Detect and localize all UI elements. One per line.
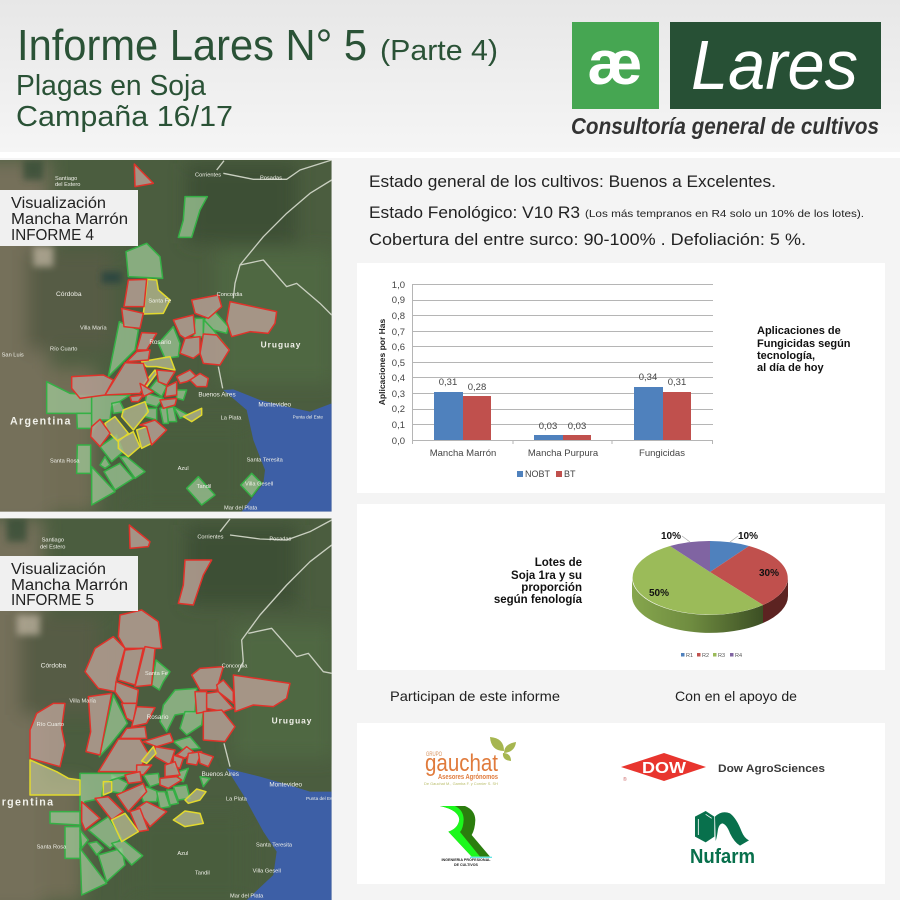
logo: Grupo Gauchat: De Gauchat M., Gamba F. y Cornier S. SH bbox=[424, 781, 498, 786]
map: informe 4: del Estero bbox=[55, 182, 80, 188]
3d pie bbox=[632, 541, 788, 633]
map: informe 4: Río Cuarto bbox=[50, 346, 77, 352]
logo: Lares: æ bbox=[588, 29, 642, 98]
map label: informe 4 bbox=[0, 190, 138, 246]
logo: Dow AgroSciences bbox=[621, 753, 825, 783]
y axis labels: 0,1 bbox=[392, 420, 405, 431]
header band bbox=[0, 0, 900, 158]
map: informe 5: Concordia bbox=[222, 664, 248, 670]
logo: Lares: Lares bbox=[691, 26, 858, 104]
map label: informe 5: INFORME 5 bbox=[11, 592, 94, 609]
value labels: 0,03 bbox=[568, 421, 586, 432]
y axis labels: 0,7 bbox=[392, 327, 405, 338]
bar chart caption bbox=[757, 325, 851, 374]
pie legend bbox=[681, 653, 742, 659]
map: informe 4 bbox=[0, 160, 333, 527]
map: informe 4: Rosario bbox=[149, 339, 172, 346]
map: informe 4: Azul bbox=[178, 466, 189, 472]
map: informe 5: Azul bbox=[177, 851, 188, 857]
category labels bbox=[430, 448, 685, 459]
pie legend: R2 bbox=[702, 653, 709, 659]
text block: estado general: (Los más tempranos en R4 solo un 10% de los lotes). bbox=[585, 208, 864, 220]
map: informe 5: Río Cuarto bbox=[37, 722, 64, 728]
logo: R ingeniería: DE CULTIVOS bbox=[454, 863, 479, 867]
map: informe 4: Corrientes bbox=[195, 173, 221, 179]
map: informe 4: Tandil bbox=[197, 484, 211, 490]
heading: apoyo: Con en el apoyo de bbox=[675, 688, 797, 704]
map: informe 4: Villa María bbox=[80, 325, 107, 331]
logo: Dow AgroSciences: ® bbox=[623, 776, 627, 783]
map label: informe 4: Visualización bbox=[11, 195, 106, 212]
logo: Nufarm: Nufarm bbox=[690, 846, 755, 868]
y axis labels: 1,0 bbox=[392, 280, 405, 291]
y axis labels: 0,3 bbox=[392, 389, 405, 400]
bar chart legend: BT bbox=[564, 469, 576, 479]
map label: informe 5: Mancha Marrón bbox=[11, 577, 128, 594]
logo: Nufarm bbox=[690, 811, 755, 868]
pie caption bbox=[494, 557, 583, 606]
bar chart grid and axis bbox=[412, 284, 713, 444]
pie caption: Soja 1ra y su bbox=[511, 570, 582, 582]
text block: estado general: Estado general de los cultivos: Buenos a Excelentes. bbox=[369, 172, 776, 191]
value labels: 0,03 bbox=[539, 421, 557, 432]
logo: Lares bbox=[571, 22, 881, 139]
map: informe 5: Santa Fe bbox=[145, 671, 168, 677]
y axis labels: 0,6 bbox=[392, 342, 405, 353]
panel: pie chart bbox=[357, 504, 885, 670]
value labels: 0,31 bbox=[439, 377, 457, 388]
bar chart legend: NOBT bbox=[525, 469, 551, 479]
map: informe 5: Villa Gesell bbox=[253, 869, 281, 875]
map: informe 5: Uruguay bbox=[272, 715, 312, 725]
value labels: 0,28 bbox=[468, 382, 486, 393]
map: informe 4: La Plata bbox=[221, 415, 242, 421]
pie labels: 50% bbox=[649, 588, 669, 599]
panel: sponsors bbox=[357, 723, 885, 884]
title: Campaña 16/17 bbox=[16, 101, 233, 133]
map: informe 5: Montevideo bbox=[269, 782, 303, 789]
map: informe 5: Mar del Plata bbox=[230, 894, 264, 900]
pie legend: R1 bbox=[686, 653, 693, 659]
panel: bar chart bbox=[357, 263, 885, 493]
bar chart caption: al día de hoy bbox=[757, 362, 825, 374]
bar chart legend bbox=[517, 469, 576, 479]
map: informe 5 bbox=[0, 518, 337, 900]
y axis title: Aplicaciones por Has bbox=[377, 319, 387, 405]
bar chart caption: Aplicaciones de bbox=[757, 325, 841, 337]
logo: Dow AgroSciences: Dow AgroSciences bbox=[718, 763, 825, 775]
map: informe 4: Santa Rosa bbox=[50, 459, 80, 465]
map label: informe 5: Visualización bbox=[11, 561, 106, 578]
map: informe 4: Córdoba bbox=[56, 291, 82, 298]
map: informe 5: Tandil bbox=[195, 870, 210, 876]
heading: participan: Participan de este informe bbox=[390, 688, 560, 704]
map: informe 4: Mar del Plata bbox=[224, 505, 258, 511]
logo: Grupo Gauchat: GRUPO bbox=[426, 751, 442, 758]
text block: estado general bbox=[369, 172, 864, 249]
pie labels bbox=[649, 531, 779, 599]
y axis labels: 0,9 bbox=[392, 295, 405, 306]
y axis labels bbox=[392, 280, 405, 447]
pie labels: 10% bbox=[738, 531, 758, 542]
map: informe 4: Argentina bbox=[10, 415, 72, 427]
logo: Grupo Gauchat: gauchat bbox=[425, 750, 498, 777]
category labels: Mancha Marrón bbox=[430, 448, 496, 459]
title: Informe Lares N° 5 bbox=[17, 21, 367, 70]
logo: Dow AgroSciences: DOW bbox=[642, 760, 687, 777]
map: informe 4: Uruguay bbox=[261, 339, 301, 349]
map: informe 4: Santa Fe bbox=[148, 299, 171, 305]
map: informe 4: Santa Teresita bbox=[247, 458, 284, 464]
pie labels: 10% bbox=[661, 531, 681, 542]
pie caption: proporción bbox=[521, 582, 582, 594]
pie caption: según fenología bbox=[494, 594, 583, 606]
map: informe 4: San Luis bbox=[2, 353, 24, 359]
y axis labels: 0,4 bbox=[392, 373, 405, 384]
map: informe 4: Buenos Aires bbox=[198, 392, 236, 399]
map: informe 5: Santa Teresita bbox=[256, 843, 293, 849]
map: informe 5: La Plata bbox=[226, 797, 248, 803]
map: informe 4: Villa Gesell bbox=[245, 481, 273, 487]
text block: estado general: Estado Fenológico: V10 R3 bbox=[369, 203, 580, 222]
logo: R ingeniería bbox=[440, 806, 492, 867]
bar chart caption: Fungicidas según bbox=[757, 338, 851, 350]
pie caption: Lotes de bbox=[535, 557, 582, 569]
value labels: 0,31 bbox=[668, 377, 686, 388]
y axis labels: 0,5 bbox=[392, 358, 405, 369]
map label: informe 4: Mancha Marrón bbox=[11, 211, 128, 228]
title bbox=[16, 21, 498, 133]
map: informe 4: Concordia bbox=[217, 292, 243, 298]
map: informe 5: Posadas bbox=[269, 537, 292, 543]
logo: Grupo Gauchat: Asesores Agrónomos bbox=[438, 774, 498, 781]
map: informe 5: Buenos Aires bbox=[202, 771, 239, 778]
text block: estado general: Cobertura del entre surco: 90-100% . Defoliación: 5 %. bbox=[369, 230, 806, 249]
map: informe 5: Rosario bbox=[147, 714, 169, 721]
title: Plagas en Soja bbox=[16, 70, 207, 102]
category labels: Mancha Purpura bbox=[528, 448, 599, 459]
map: informe 4: Punta del Este bbox=[293, 414, 323, 419]
pie legend: R3 bbox=[718, 653, 725, 659]
y axis labels: 0,2 bbox=[392, 404, 405, 415]
map: informe 4: Santiago bbox=[55, 176, 77, 182]
y axis labels: 0,0 bbox=[392, 436, 405, 447]
bars bbox=[434, 387, 691, 440]
map: informe 4: Montevideo bbox=[258, 402, 292, 409]
category labels: Fungicidas bbox=[639, 448, 685, 459]
logo: R ingeniería: INGENIERIA PROFESIONAL bbox=[442, 858, 491, 862]
map: informe 5: Córdoba bbox=[41, 663, 66, 670]
map: informe 5: Corrientes bbox=[197, 534, 224, 540]
bar chart caption: tecnología, bbox=[757, 350, 815, 362]
map: informe 5: del Estero bbox=[40, 544, 65, 550]
title: (Parte 4) bbox=[380, 35, 498, 67]
map label: informe 4: INFORME 4 bbox=[11, 227, 94, 244]
map: informe 5: Villa María bbox=[69, 699, 97, 705]
map: informe 5: Santa Rosa bbox=[37, 844, 67, 850]
map: informe 5: Punta del Este bbox=[306, 796, 337, 801]
map label: informe 5 bbox=[0, 556, 138, 611]
y axis labels: 0,8 bbox=[392, 311, 405, 322]
pie legend: R4 bbox=[735, 653, 742, 659]
value labels bbox=[439, 372, 686, 432]
map: informe 4: Posadas bbox=[260, 175, 282, 181]
value labels: 0,34 bbox=[639, 372, 657, 383]
pie labels: 30% bbox=[759, 568, 779, 579]
map: informe 5: Santiago bbox=[42, 538, 64, 544]
logo: Grupo Gauchat bbox=[424, 737, 516, 786]
